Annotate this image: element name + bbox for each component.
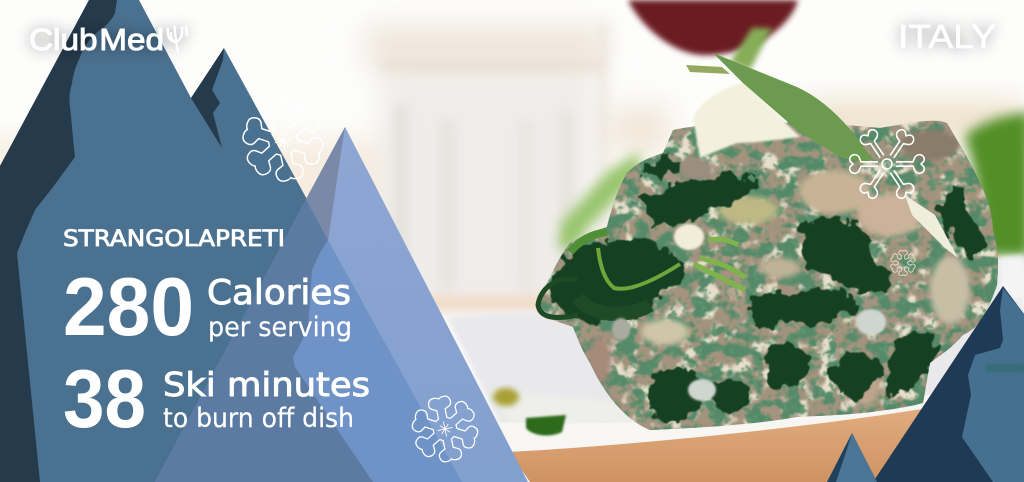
stat: ski minutes: Ski minutes — [163, 365, 370, 404]
plate side — [505, 403, 925, 482]
dish name: STRANGOLAPRETI — [63, 227, 285, 252]
spinach strands — [598, 248, 680, 289]
stat: calories — [63, 260, 352, 353]
stat: ski minutes: to burn off dish — [163, 403, 354, 434]
sage leaf — [686, 65, 730, 74]
plate — [447, 255, 1024, 445]
snowflake on leaf — [850, 128, 924, 200]
upper grey sliver — [306, 127, 345, 240]
dumpling — [530, 53, 1010, 435]
dark face left — [0, 0, 117, 482]
stat: calories: Calories — [207, 273, 351, 313]
plate garnish — [526, 415, 566, 435]
onion pieces — [612, 309, 886, 401]
left of ridge inside main — [155, 199, 373, 482]
logo: Club Med: Club Med — [29, 22, 164, 57]
mountain: front blue peak — [155, 127, 528, 482]
snowflake lower — [405, 390, 485, 468]
right of ridge inside main — [293, 240, 462, 482]
dark face peak — [191, 48, 224, 148]
background greens — [558, 112, 1024, 256]
snowflake upper — [235, 94, 331, 188]
small peak — [827, 433, 877, 482]
small faint snowflake — [890, 250, 916, 276]
stat: calories: 280 — [63, 260, 194, 353]
stat: ski minutes — [63, 352, 370, 445]
parmesan shards — [693, 82, 800, 158]
country label: ITALY — [898, 18, 996, 55]
stat: calories: per serving — [208, 312, 352, 343]
spinach loop — [538, 279, 578, 318]
mountain: left main — [0, 0, 462, 482]
bottom-right mountains — [827, 286, 1024, 482]
wine glass — [628, 0, 798, 55]
stat: ski minutes: 38 — [63, 352, 146, 445]
